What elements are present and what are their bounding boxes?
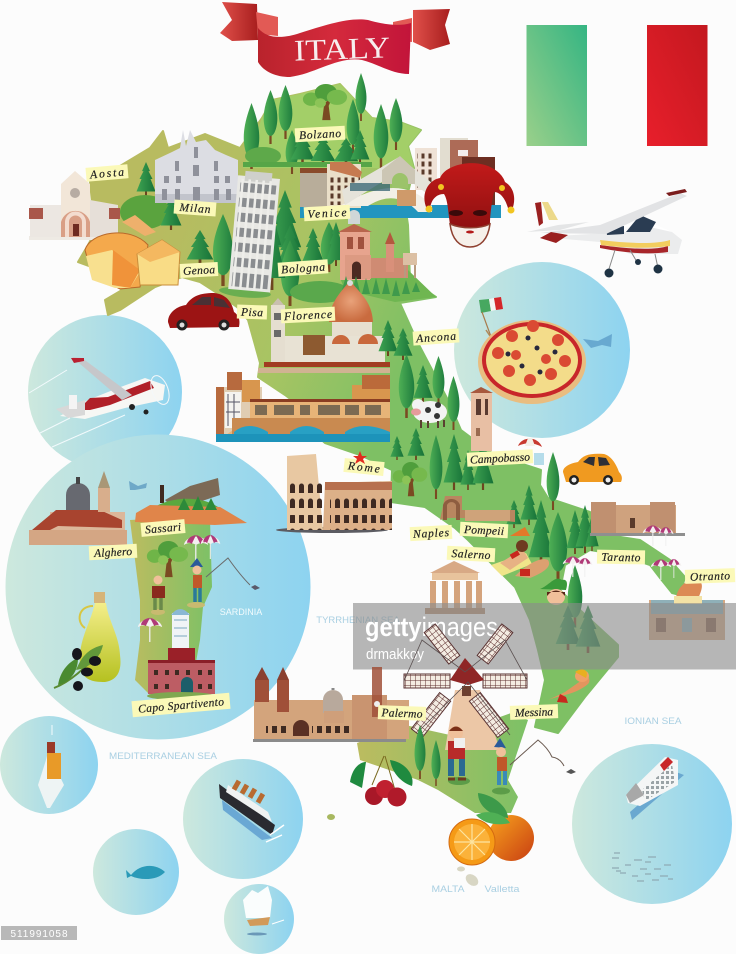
city labels <box>85 126 735 721</box>
building: Sardinian church <box>29 471 127 545</box>
map: Sardinia <box>130 518 212 695</box>
map: Sicily <box>357 713 528 813</box>
building: Campobasso bell tower <box>470 387 493 451</box>
building: Aosta church <box>29 171 120 240</box>
label: Taranto <box>597 550 645 564</box>
sea circle: fish <box>93 829 179 915</box>
car: yellow <box>563 454 622 485</box>
animal: tuna <box>126 866 165 879</box>
icon: small plane, Sardinia <box>129 481 147 490</box>
title ribbon <box>220 2 450 77</box>
label: Florence: Florence <box>283 309 332 323</box>
label: Pisa: Pisa <box>240 307 263 319</box>
building: Milan cathedral <box>155 130 239 203</box>
label: Alghero: Alghero <box>93 546 133 560</box>
sea label: Sardinia: SARDINIA <box>220 607 262 617</box>
label: Palermo: Palermo <box>380 707 423 721</box>
label: Bolzano: Bolzano <box>299 128 342 142</box>
map: mainland Italy <box>78 84 685 733</box>
building: Ponte Vecchio <box>216 372 390 442</box>
ship: sailing ship <box>243 886 284 936</box>
sea label: Mediterranean: MEDITERRANEAN SEA <box>109 751 218 762</box>
people: sunbather Calabria <box>548 670 589 703</box>
mask: carnival jester <box>424 163 514 247</box>
beach umbrellas: Sardinia <box>184 535 220 561</box>
label: Milan <box>174 200 216 216</box>
icon: small plane silhouette <box>583 334 612 348</box>
watermark band <box>353 603 736 670</box>
map: small islands <box>327 814 481 888</box>
label: Messina: Messina <box>514 706 553 720</box>
building: Florence cathedral <box>258 280 390 373</box>
watermark band: drmakkoy <box>366 646 424 663</box>
people: farmer with fish <box>448 726 470 785</box>
food: olive oil bottle with olives <box>54 592 120 691</box>
building: Venice houses and canal <box>300 138 501 218</box>
people: sunbathers <box>491 527 549 578</box>
label: Milan: Milan <box>178 202 211 216</box>
beach umbrella Sardinia south <box>138 618 162 642</box>
label: Pompeii: Pompeii <box>463 524 504 538</box>
airplane: white and yellow <box>527 189 687 278</box>
people: fisherman Sardinia <box>187 558 260 608</box>
label: Aosta: Aosta <box>89 167 125 182</box>
label: Capo Spartivento <box>131 693 231 717</box>
sea label: Ionian: IONIAN SEA <box>624 716 682 727</box>
beach umbrella and chair <box>518 438 559 510</box>
title ribbon: ITALY <box>293 31 391 68</box>
fruit: oranges <box>449 793 534 865</box>
label: Salerno: Salerno <box>451 548 491 562</box>
label: Bologna: Bologna <box>281 261 326 277</box>
sea circle: plane <box>28 315 182 469</box>
car: red <box>168 293 239 330</box>
boat: small top-view <box>38 725 64 808</box>
label: Campobasso: Campobasso <box>470 451 531 467</box>
trees: south <box>506 485 600 653</box>
image id tag: 511991058 <box>10 929 68 940</box>
label: Rome: Rome <box>346 460 380 476</box>
flag: Italian tricolour <box>526 25 708 146</box>
label: Salerno <box>447 546 495 562</box>
building: Colosseum <box>276 454 392 533</box>
sea label: Valletta: Valletta <box>484 884 520 895</box>
image id tag <box>1 926 77 940</box>
windmill <box>404 624 527 750</box>
sea circle: pizza <box>454 262 630 438</box>
label: Genoa: Genoa <box>183 264 216 278</box>
watermark band: gettyimages <box>365 612 498 642</box>
label: Venice: Venice <box>307 207 347 221</box>
tree: Sardinia <box>147 541 188 577</box>
trees: central <box>378 320 493 499</box>
label: Sassari <box>140 519 186 537</box>
ship: cruise ship <box>626 757 684 820</box>
trees: north <box>243 73 402 174</box>
sea circle: Sardinia <box>6 434 310 740</box>
icon: Rome star <box>353 451 367 464</box>
sea circle: cruise ship <box>572 744 732 904</box>
label: Messina <box>510 704 558 720</box>
label: Taranto: Taranto <box>601 552 641 564</box>
sea label: Malta: MALTA <box>432 884 465 895</box>
label: Otranto: Otranto <box>690 570 730 584</box>
label: Aosta <box>85 164 129 182</box>
label: Naples: Naples <box>412 527 450 541</box>
sea circle: small boat <box>0 716 98 814</box>
building: Pisa tower <box>219 170 281 300</box>
label: Sassari: Sassari <box>145 521 182 537</box>
building: lighthouse and red house <box>147 609 215 700</box>
building: Greek temple <box>425 561 485 614</box>
building: Otranto palace <box>649 579 725 640</box>
ship: ocean liner <box>219 780 284 842</box>
sea circle: liner <box>183 759 303 879</box>
building: Bologna towers <box>338 210 436 302</box>
airplane: red and white <box>29 357 173 447</box>
building: Pompeii ruins <box>440 496 515 522</box>
map: Alpine light-green zone <box>243 84 421 168</box>
people: farmer in green hat <box>540 579 567 605</box>
fruit: cherries <box>350 756 413 806</box>
label: Ancona: Ancona <box>415 331 457 345</box>
trees: Lombardy and Liguria <box>120 162 350 306</box>
people: man Sardinia <box>151 576 165 615</box>
animal: cow <box>411 399 447 428</box>
beach umbrellas: Puglia <box>563 525 681 580</box>
school of fish <box>612 853 673 881</box>
label: Otranto <box>685 568 735 584</box>
trees: Sicily <box>415 725 441 786</box>
sea circle: sailing ship <box>224 884 294 954</box>
label: Pisa <box>237 304 267 320</box>
building: Taranto castle <box>590 502 685 536</box>
food: cheese <box>85 215 180 289</box>
sea label: Tyrrhenian: TYRRHENIAN SEA <box>316 615 400 626</box>
label: Capo Spartivento: Capo Spartivento <box>138 696 225 716</box>
building: Sassari castle <box>135 478 247 525</box>
people: fisherman Sicily <box>492 738 576 794</box>
building: Palermo cathedral <box>253 667 409 742</box>
label: Rome <box>343 458 385 476</box>
label: Alghero <box>89 544 137 560</box>
food: pizza with flag <box>478 297 586 404</box>
